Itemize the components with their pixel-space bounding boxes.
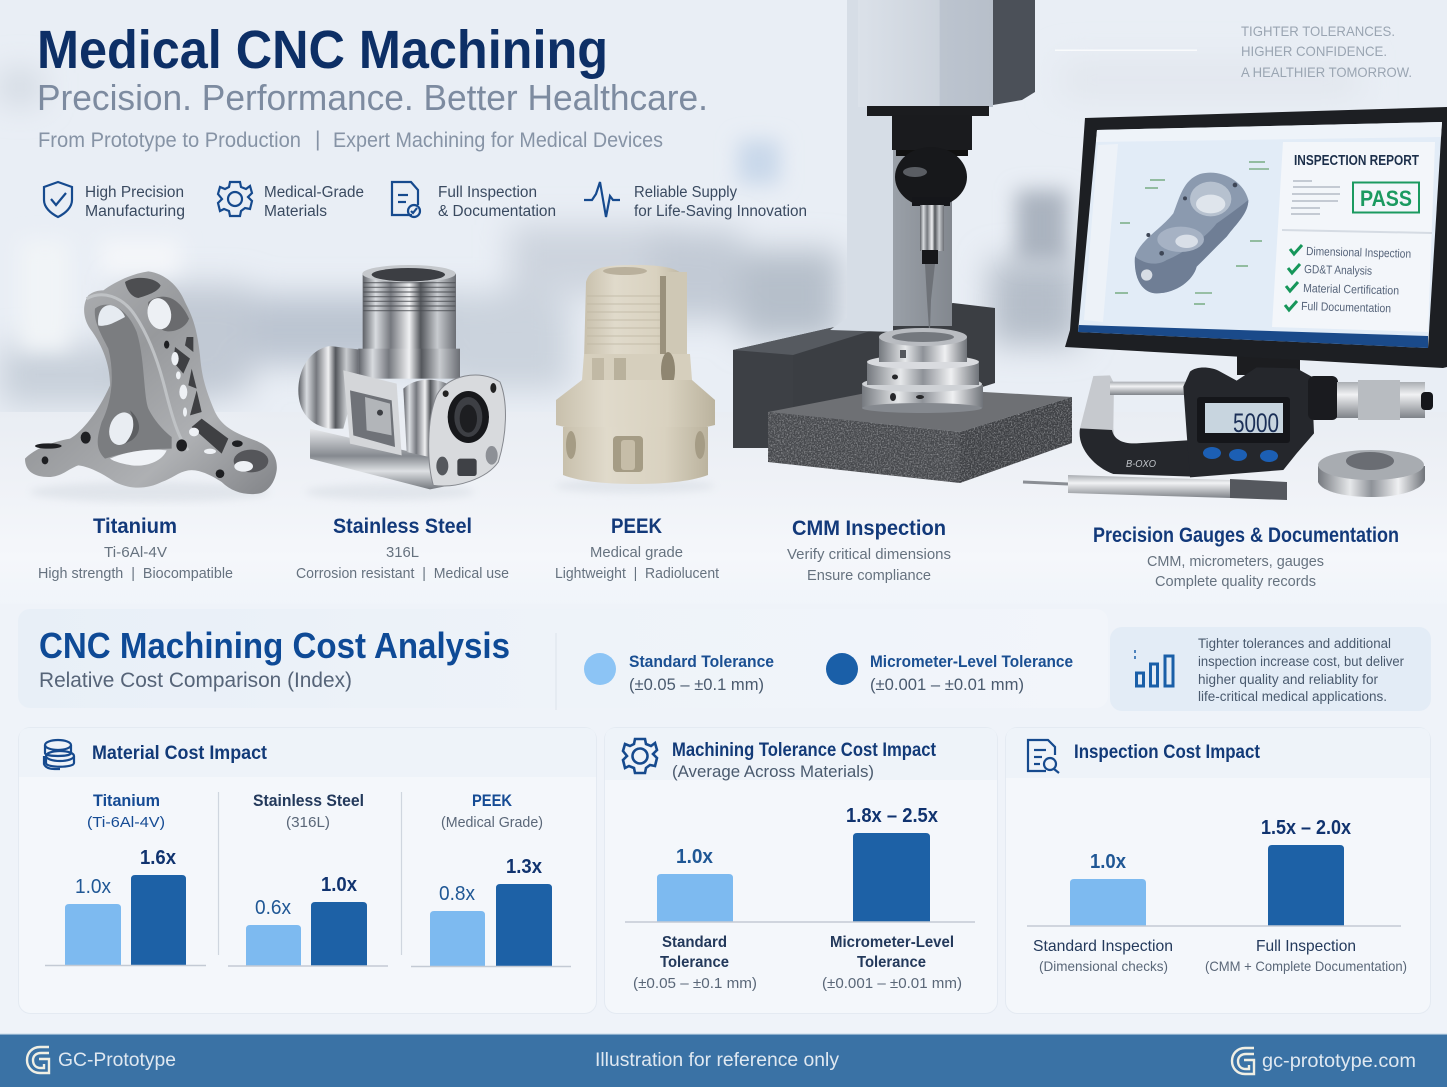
panel heading: Inspection Cost Impact (1074, 742, 1261, 763)
label: standard tolerance: Tolerance (660, 954, 729, 971)
caption: gauges and documentation: Precision Gauges & Documentation (1093, 524, 1399, 547)
machine column (830, 0, 952, 332)
label: standard inspection: (Dimensional checks) (1039, 958, 1168, 974)
report checklist: Full Documentation (1301, 299, 1391, 315)
micrometer display (1197, 397, 1290, 443)
note text: Tighter tolerances and additional (1198, 636, 1391, 651)
note text: life-critical medical applications. (1198, 689, 1387, 704)
chart: titanium: (Ti-6Al-4V) (87, 814, 165, 831)
lower section background (0, 604, 1447, 1034)
feature row (44, 182, 807, 220)
chart: PEEK: PEEK (472, 792, 512, 810)
bracket drill dots (35, 341, 243, 478)
caption: CMM inspection (787, 517, 951, 584)
label: micrometer-level tolerance (822, 934, 962, 992)
panel heading: Machining Tolerance Cost Impact (672, 740, 937, 761)
footer logo left (27, 1047, 176, 1073)
micrometer body (1183, 367, 1314, 477)
feature: materials: Medical-Grade (264, 184, 364, 201)
feature: reliable supply (584, 182, 807, 220)
caption: gauges and documentation: Complete quality records (1155, 573, 1316, 590)
object shadows (30, 479, 715, 502)
chart: titanium: 1.0x (75, 876, 111, 898)
chart: titanium (45, 792, 206, 966)
feature: high precision (44, 182, 185, 220)
panel heading: Material Cost Impact (92, 743, 268, 764)
label: standard inspection (1033, 938, 1173, 974)
CAD part on screen (1135, 173, 1248, 293)
tagline: | (315, 128, 320, 151)
top-right slogan: A HEALTHIER TOMORROW. (1241, 64, 1412, 80)
label: standard tolerance (633, 934, 757, 992)
bracket lattice (173, 337, 228, 454)
tagline: Expert Machining for Medical Devices (333, 129, 663, 152)
bar chart: 1.0x (676, 846, 713, 868)
report checklist: GD&T Analysis (1304, 262, 1372, 278)
feature: documentation: & Documentation (438, 203, 556, 220)
shoulder ribs (582, 354, 692, 380)
header block (37, 20, 708, 152)
caption: titanium: Ti-6Al-4V (104, 544, 167, 561)
chart: titanium: Titanium (93, 792, 160, 810)
top-right slogan: TIGHTER TOLERANCES. (1241, 23, 1395, 39)
bracket upper windows (125, 278, 161, 298)
caption: CMM inspection: Verify critical dimensions (787, 546, 951, 563)
titanium bracket (25, 271, 277, 494)
subtitle: Precision. Performance. Better Healthcare. (37, 77, 708, 118)
chart: stainless steel (228, 792, 388, 966)
caption: titanium (38, 515, 233, 582)
bracket foot hole (234, 450, 268, 472)
bar chart: 1.8x – 2.5x (846, 805, 938, 827)
note text: higher quality and reliablity for (1198, 672, 1378, 687)
section subheading: Relative Cost Comparison (Index) (39, 668, 352, 692)
label: micrometer-level tolerance: Micrometer-Level (830, 934, 954, 951)
panel: machining tolerance cost impact (604, 728, 998, 1014)
icon: material stack (44, 740, 74, 769)
bar chart: 1.5x – 2.0x (1261, 817, 1351, 839)
legend: micrometer tolerance: (±0.001 – ±0.01 mm) (870, 676, 1024, 694)
flange (429, 375, 505, 486)
central body (343, 370, 402, 455)
chart: PEEK: 0.8x (439, 883, 475, 905)
bar chart (1027, 817, 1401, 926)
chart: stainless steel: 0.6x (255, 897, 291, 919)
chart: stainless steel: 1.0x (321, 874, 357, 896)
feature: high precision: Manufacturing (85, 203, 185, 220)
monitor frame (1065, 107, 1447, 368)
threaded tube (358, 265, 460, 379)
chart: PEEK: 1.3x (506, 856, 542, 878)
caption: gauges and documentation (1093, 524, 1399, 590)
legend: standard tolerance: Standard Tolerance (629, 653, 774, 671)
label: full inspection (1205, 938, 1407, 974)
micrometer barrel (1308, 376, 1433, 420)
digital micrometer (1080, 367, 1433, 477)
base block (310, 429, 450, 489)
stainless steel part (298, 265, 505, 489)
panel: inspection cost impact (1006, 728, 1430, 1014)
feature: high precision: High Precision (85, 184, 184, 201)
bar chart: 1.0x (1090, 851, 1126, 873)
legend: standard tolerance (584, 653, 774, 694)
chart: titanium: 1.6x (140, 847, 176, 869)
label: full inspection: Full Inspection (1256, 938, 1356, 955)
report checklist: Dimensional Inspection (1306, 244, 1411, 261)
footer logo right (1232, 1048, 1416, 1074)
right cylinder (403, 380, 447, 459)
note text: inspection increase cost, but deliver (1198, 654, 1404, 669)
feature: reliable supply: Reliable Supply (634, 184, 737, 201)
icon: bar chart (1135, 650, 1173, 686)
bracket silhouette (25, 271, 277, 494)
caption: titanium: Titanium (93, 515, 177, 538)
footer logo left: GC-Prototype (58, 1050, 176, 1071)
caption: PEEK: PEEK (611, 515, 662, 538)
pin gauge (1023, 475, 1287, 500)
turned metal part (862, 328, 983, 413)
icon: gear (623, 739, 657, 773)
bracket lower holes (105, 409, 138, 448)
bracket front rim (87, 295, 188, 450)
lower body (563, 427, 708, 484)
report title: INSPECTION REPORT (1294, 153, 1419, 169)
footer logo right: gc-prototype.com (1262, 1051, 1416, 1072)
caption: CMM inspection: CMM Inspection (792, 517, 946, 540)
legend: standard tolerance: (±0.05 – ±0.1 mm) (629, 676, 764, 694)
caption: stainless steel (296, 515, 509, 582)
label: standard tolerance: Standard (662, 934, 727, 951)
inspection monitor (1065, 107, 1447, 375)
PASS stamp: PASS (1360, 186, 1412, 211)
footer bar (0, 1033, 1447, 1087)
chart: stainless steel: (316L) (286, 814, 330, 831)
left round cap (298, 346, 358, 429)
chart: stainless steel: Stainless Steel (253, 792, 364, 810)
label: micrometer-level tolerance: Tolerance (857, 954, 926, 971)
CMM inspection machine photo (733, 0, 1072, 483)
tube (584, 265, 687, 360)
chart: PEEK (411, 792, 571, 966)
caption: stainless steel: Corrosion resistant | Medical use (296, 565, 509, 582)
note text (1198, 636, 1404, 704)
feature: materials: Materials (264, 203, 327, 220)
flange (556, 380, 715, 430)
caption: PEEK (555, 515, 720, 582)
legend: micrometer tolerance (826, 653, 1073, 694)
micrometer brand: B-OXO (1126, 459, 1156, 470)
decorative-line top (1055, 50, 1197, 51)
feature: materials (218, 182, 364, 220)
CAD annotations (1115, 162, 1269, 304)
panel: cost analysis header (18, 609, 1108, 710)
tagline (38, 128, 663, 152)
footer note: Illustration for reference only (595, 1050, 840, 1071)
report checklist: Material Certification (1303, 281, 1399, 298)
caption: stainless steel: Stainless Steel (333, 515, 472, 538)
report panel (1272, 142, 1435, 332)
feature: documentation (392, 182, 556, 220)
top-right slogan (1241, 23, 1412, 80)
icon: report magnifier (1028, 740, 1059, 773)
feature: reliable supply: for Life-Saving Innovation (634, 203, 807, 220)
soft fade below objects (0, 590, 1447, 620)
bar chart (625, 805, 975, 922)
monitor stand (1237, 355, 1300, 375)
top-right slogan: HIGHER CONFIDENCE. (1241, 43, 1387, 59)
lab background photo (0, 0, 1447, 620)
monitor screen (1078, 122, 1442, 348)
title: Medical CNC Machining (37, 20, 608, 80)
callout: cost note (1110, 627, 1431, 711)
label: standard inspection: Standard Inspection (1033, 938, 1173, 955)
label: standard tolerance: (±0.05 – ±0.1 mm) (633, 975, 757, 992)
caption: titanium: High strength | Biocompatible (38, 565, 233, 582)
label: micrometer-level tolerance: (±0.001 – ±0.01 mm) (822, 975, 962, 992)
legend: micrometer tolerance: Micrometer-Level Tolerance (870, 653, 1073, 671)
granite block (768, 387, 1072, 483)
report checklist (1285, 244, 1411, 315)
panel heading: (Average Across Materials) (672, 763, 874, 781)
section heading: CNC Machining Cost Analysis (39, 625, 510, 666)
caption: gauges and documentation: CMM, micrometers, gauges (1147, 553, 1324, 570)
bracket top window (98, 305, 125, 326)
PEEK part (556, 265, 715, 484)
label: full inspection: (CMM + Complete Documentation) (1205, 958, 1407, 974)
caption: CMM inspection: Ensure compliance (807, 567, 931, 584)
white table surface (0, 412, 1447, 620)
bracket web (95, 305, 172, 459)
caption: stainless steel: 316L (386, 544, 419, 561)
setting ring (1318, 450, 1425, 497)
caption: PEEK: Medical grade (590, 544, 683, 561)
caption: PEEK: Lightweight | Radiolucent (555, 565, 720, 582)
panel: material cost impact (18, 728, 596, 1014)
chart: PEEK: (Medical Grade) (441, 814, 543, 831)
micrometer display: 5000 (1233, 408, 1279, 438)
dark machine base (733, 303, 995, 448)
feature: documentation: Full Inspection (438, 184, 537, 201)
panel heading (672, 740, 937, 781)
micrometer buttons (1203, 447, 1278, 462)
tagline: From Prototype to Production (38, 129, 301, 152)
probe head housing (858, 0, 1035, 330)
micrometer frame (1080, 375, 1193, 477)
